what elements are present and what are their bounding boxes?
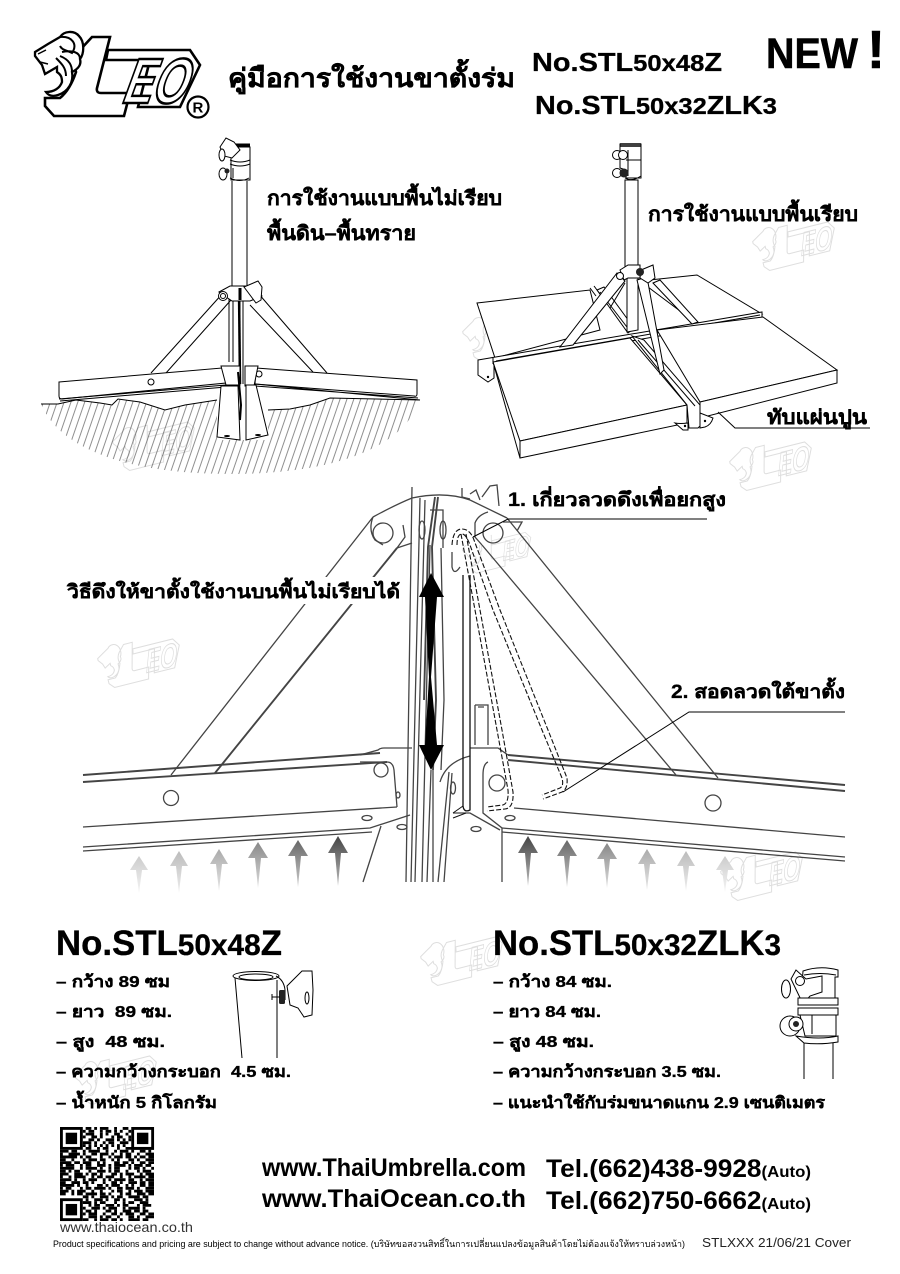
dashed wire loop 2 — [457, 534, 563, 795]
contact: websites: www.ThaiOcean.co.th — [261, 1185, 526, 1213]
NEW badge — [766, 20, 885, 80]
watermarks: EO — [144, 636, 179, 681]
illustration: stand on flat ground — [477, 144, 837, 458]
title: คู่มือการใช้งานขาตั้งร่ม — [228, 58, 515, 95]
logo: LEO: R — [192, 100, 204, 116]
back slabs — [477, 290, 600, 358]
upper hub — [219, 286, 262, 301]
illustration: stand on uneven ground — [41, 138, 420, 474]
NEW badge: ! — [867, 20, 885, 80]
heading: how to adjust: วิธีดึงให้ขาตั้งใช้งานบนพื้นไม่เรียบได้ — [67, 577, 400, 603]
contact: telephones: Tel.(662)438-9928 (Auto) — [546, 1155, 811, 1183]
watermarks: EO — [799, 219, 834, 264]
callout: press on concrete slab — [718, 407, 870, 431]
central plates — [221, 366, 240, 385]
hub — [620, 265, 640, 280]
dashed wire loop 1 — [461, 534, 508, 807]
right beam — [255, 368, 417, 396]
ground hatch — [41, 398, 420, 474]
heading: STL50x32ZLK3: No.STL50x32ZLK3 — [493, 924, 781, 963]
model number 2: No.STL 50x32 ZLK3 — [535, 90, 777, 120]
right beam — [508, 755, 845, 791]
watermarks — [72, 211, 843, 1108]
spec list: STL50x32ZLK3 — [493, 973, 825, 1112]
contact: telephones: Tel.(662)750-6662 (Auto) — [546, 1187, 811, 1215]
spec list: STL50x48Z: – น้ำหนัก 5 กิโลกรัม — [56, 1090, 217, 1112]
model number 1: No.STL 50x48 Z — [532, 47, 722, 77]
watermarks: EO — [767, 849, 802, 894]
contact: websites: www.ThaiUmbrella.com — [261, 1154, 526, 1182]
front beam — [632, 336, 700, 428]
head clamp — [231, 147, 250, 180]
callout 1 — [473, 486, 726, 537]
fine print: Product specifications and pricing are subject to change without advance notice. (บริษัทขอสงวนสิทธิ์ในการเปลี่ยนแปลงข้อมูลสินค้าโดยไม่ต้องแจ้งให้ทราบล่วงหน้า) — [53, 1237, 685, 1250]
lift arrows — [130, 836, 734, 893]
central tube — [229, 181, 247, 384]
callout: press on concrete slab: ทับแผ่นปูน — [767, 407, 867, 431]
heading: STL50x48Z: No.STL50x48Z — [56, 924, 282, 963]
watermarks: EO — [509, 309, 544, 354]
watermarks: EO — [776, 439, 811, 484]
spec list: STL50x32ZLK3: – ความกว้างกระบอก 3.5 ซม. — [493, 1063, 721, 1081]
feet — [217, 386, 240, 440]
icon: tube with wing nut — [233, 971, 313, 1058]
callout: double arrow — [419, 573, 444, 770]
contact: websites — [261, 1154, 526, 1213]
spec list: STL50x32ZLK3: – แนะนำใช้กับร่มขนาดแกน 2.9 เซนติเมตร — [493, 1093, 825, 1112]
logo: LEO: EO — [115, 46, 205, 118]
document code: STLXXX 21/06/21 Cover — [702, 1235, 852, 1250]
left beam — [83, 753, 387, 782]
small bolt behind slab — [590, 286, 600, 296]
back beam — [597, 287, 634, 333]
watermarks: EO — [467, 934, 502, 979]
long bar — [478, 312, 762, 382]
contact: telephones — [546, 1155, 811, 1215]
spec list: STL50x48Z — [56, 973, 291, 1112]
watermarks: EO — [159, 419, 194, 464]
illustration: detail of pull wire — [83, 485, 845, 882]
struts — [151, 293, 327, 373]
QR code — [60, 1128, 154, 1220]
NEW badge: NEW — [766, 30, 858, 78]
icon: clamp head — [780, 968, 838, 1079]
website caption: www.thaiocean.co.th — [59, 1219, 193, 1235]
spec list: STL50x32ZLK3: – สูง 48 ซม. — [493, 1034, 594, 1053]
solid wire — [463, 575, 470, 811]
spec list: STL50x48Z: – สูง 48 ซม. — [56, 1034, 165, 1053]
spec list: STL50x32ZLK3: – ยาว 84 ซม. — [493, 1004, 601, 1021]
front slabs — [493, 338, 687, 441]
callout 1: 1. เกี่ยวลวดดึงเพื่อยกสูง — [508, 486, 726, 512]
bottom plates — [360, 748, 412, 807]
watermarks: EO — [121, 1053, 156, 1098]
label: uneven ground use: การใช้งานแบบพื้นไม่เรียบ — [267, 183, 502, 210]
spec list: STL50x48Z: – ความกว้างกระบอก 4.5 ซม. — [56, 1063, 291, 1081]
callout 2 — [563, 677, 845, 792]
label: flat ground use: การใช้งานแบบพื้นเรียบ — [648, 199, 858, 226]
label white background — [64, 577, 402, 604]
callout 2: 2. สอดลวดใต้ขาตั้ง — [671, 677, 845, 703]
hub top — [373, 495, 507, 548]
logo: LEO — [35, 32, 208, 118]
spec list: STL50x48Z: – กว้าง 89 ซม — [56, 973, 170, 991]
watermarks: EO — [501, 529, 531, 567]
label: soil and sand: พื้นดิน–พื้นทราย — [267, 218, 416, 245]
spec list: STL50x32ZLK3: – กว้าง 84 ซม. — [493, 973, 612, 991]
tube — [625, 180, 638, 270]
struts — [171, 517, 373, 775]
left beam — [59, 368, 226, 399]
struts — [560, 273, 625, 347]
spec list: STL50x48Z: – ยาว 89 ซม. — [56, 1004, 172, 1021]
center rods — [406, 487, 452, 882]
clamp head — [620, 144, 641, 178]
